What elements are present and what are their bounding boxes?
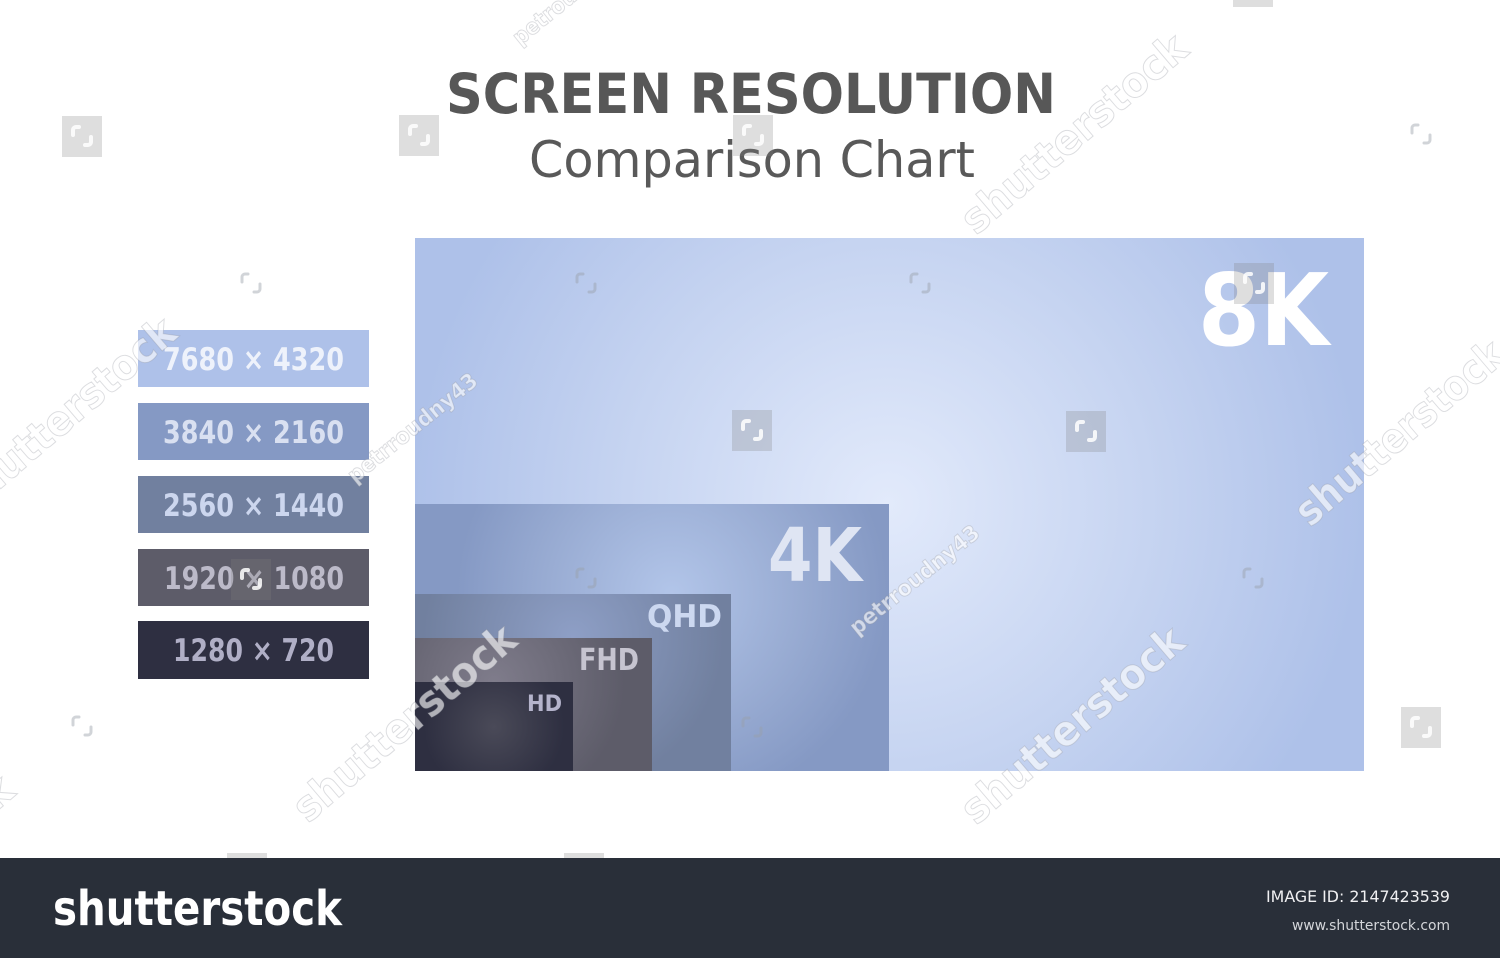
watermarks: shutterstock [951,615,1195,834]
footer url: www.shutterstock.com [1292,918,1450,934]
chart: nested resolution rectangles [415,238,1364,771]
watermarks: shutterstock [283,613,527,832]
watermarks: shutterstock [951,23,1198,244]
panel: resolution legend [138,330,369,679]
legend row: 7680 x 4320: 7680 × 4320 [163,342,344,378]
rectangle: HD [415,682,573,771]
heading: screen resolution: SCREEN RESOLUTION [446,62,1056,126]
rectangle: FHD [415,638,652,771]
footer logo: shutterstock [53,881,343,937]
legend row: 1280 x 720: 1280 × 720 [173,633,334,669]
rectangle: 4K: 4K [768,513,864,599]
rectangle: QHD: QHD [647,599,722,635]
footer bar [0,858,1500,958]
watermarks: petrroudny43 [343,369,483,489]
footer image id: IMAGE ID: 2147423539 [1266,887,1450,906]
rectangle: 8K: 8K [1198,252,1332,369]
watermarks: petrroudny43 [845,521,985,641]
rectangle: HD: HD [527,692,562,717]
legend row: 2560 x 1440: 2560 × 1440 [163,488,344,524]
subheading: comparison chart: Comparison Chart [529,131,975,189]
rectangle: QHD [415,594,731,771]
title [446,62,1056,189]
legend row: 1920 x 1080 [138,549,369,606]
rectangle: 4K [415,504,889,771]
legend row: 1280 x 720 [138,621,369,679]
legend row: 3840 x 2160: 3840 × 2160 [163,415,344,451]
legend row: 3840 x 2160 [138,403,369,460]
legend row: 1920 x 1080: 1920 × 1080 [164,561,344,597]
rectangle: FHD: FHD [579,643,639,678]
legend row: 7680 x 4320 [138,330,369,387]
legend row: 2560 x 1440 [138,476,369,533]
